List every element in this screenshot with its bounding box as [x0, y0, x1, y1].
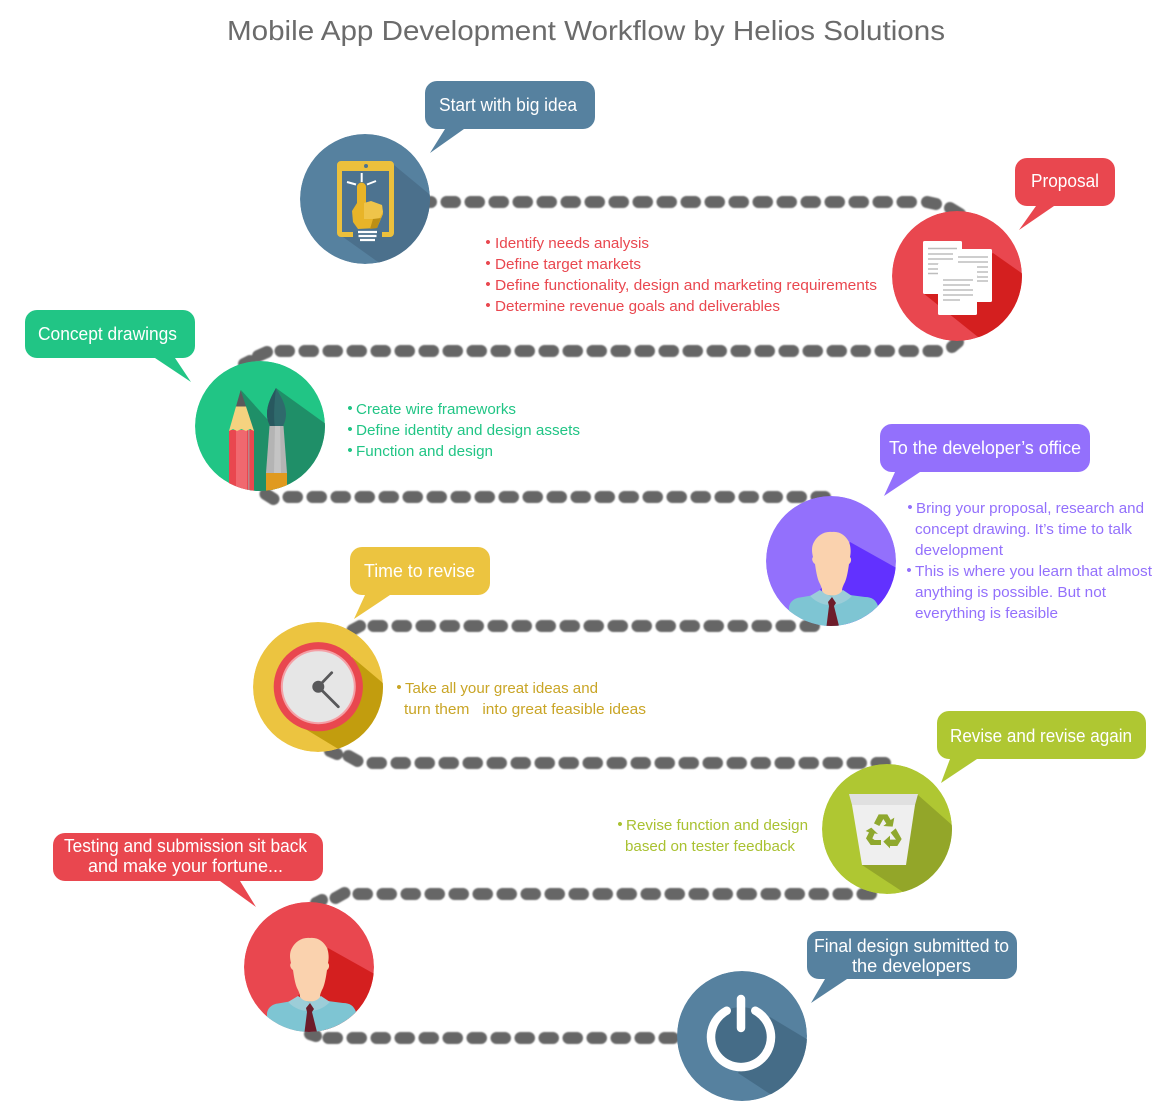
- connector: testing to final design: [310, 1034, 685, 1038]
- title: Mobile App Development Workflow by Helios Solutions: [227, 15, 945, 46]
- text block: developer bullets: •: [906, 562, 912, 579]
- text block: concept drawing bullets: •: [347, 442, 353, 459]
- icon: developer person: [766, 496, 896, 626]
- text block: concept drawing bullets: Function and design: [356, 443, 493, 460]
- callout: time to revise: [350, 547, 490, 619]
- text block: revise again bullets: [617, 816, 808, 855]
- callout: testing and submission: [53, 833, 323, 907]
- text block: developer bullets: development: [915, 542, 1004, 559]
- callout: proposal: [1015, 158, 1115, 230]
- text block: proposal bullets: Define target markets: [495, 256, 641, 273]
- connector: developer to revise: [352, 626, 820, 630]
- callout: concept drawings: [25, 310, 195, 382]
- text block: proposal bullets: Identify needs analysis: [495, 235, 649, 252]
- text block: concept drawing bullets: •: [347, 400, 353, 417]
- text block: time to revise bullets: •: [396, 679, 402, 696]
- connector: concept drawings to developer: [266, 494, 830, 499]
- connector: revise again to testing: [316, 893, 880, 903]
- text block: time to revise bullets: turn them into great feasible ideas: [404, 701, 646, 718]
- callout: start with big idea: [425, 81, 595, 153]
- callout: revise and revise again: [937, 711, 1146, 783]
- callout: proposal: Proposal: [1031, 171, 1099, 191]
- connector: proposal to concept drawings: [244, 342, 958, 364]
- text block: concept drawing bullets: Define identity and design assets: [356, 422, 580, 439]
- text block: proposal bullets: [485, 234, 877, 315]
- icon: tester person: [244, 902, 374, 1032]
- callout: revise and revise again: Revise and revise again: [950, 726, 1132, 746]
- icon: recycling bin: [822, 764, 960, 900]
- callout: concept drawings: Concept drawings: [38, 324, 177, 344]
- callout: time to revise: Time to revise: [364, 561, 475, 581]
- text block: proposal bullets: •: [485, 297, 491, 314]
- icon: pencil and brush: [195, 361, 330, 500]
- text block: developer bullets: Bring your proposal, research and: [916, 500, 1144, 517]
- text block: developer bullets: anything is possible. But not: [915, 584, 1107, 601]
- icon: proposal documents: [892, 211, 1022, 341]
- text block: proposal bullets: •: [485, 255, 491, 272]
- text block: developer bullets: [906, 499, 1153, 622]
- callout: testing and submission: Testing and submission sit back: [64, 836, 308, 856]
- text block: developer bullets: concept drawing. It’s time to talk: [915, 521, 1132, 538]
- text block: revise again bullets: Revise function and design: [626, 817, 808, 834]
- text block: concept drawing bullets: •: [347, 421, 353, 438]
- text block: proposal bullets: •: [485, 276, 491, 293]
- text block: proposal bullets: •: [485, 234, 491, 251]
- callout: testing and submission: and make your fortune...: [88, 856, 283, 876]
- callout: to the developer's office: To the developer’s office: [889, 438, 1081, 458]
- text block: time to revise bullets: Take all your great ideas and: [405, 680, 598, 697]
- callout: to the developer's office: [880, 424, 1090, 496]
- icon: power button: [677, 971, 807, 1101]
- text block: time to revise bullets: [396, 679, 646, 718]
- text block: revise again bullets: based on tester feedback: [625, 838, 796, 855]
- callout: final design submitted: the developers: [852, 956, 971, 976]
- text block: developer bullets: everything is feasible: [915, 605, 1058, 622]
- callout: final design submitted: [807, 931, 1017, 1003]
- callout: start with big idea: Start with big idea: [439, 95, 578, 115]
- icon: clock: [253, 622, 383, 752]
- connector: revise to revise again: [330, 751, 890, 763]
- callout: final design submitted: Final design submitted to: [814, 936, 1009, 956]
- text block: proposal bullets: Define functionality, design and marketing requirements: [495, 277, 877, 294]
- text block: concept drawing bullets: Create wire frameworks: [356, 401, 516, 418]
- text block: concept drawing bullets: [347, 400, 580, 460]
- icon: tablet and light bulb: [300, 134, 430, 264]
- text block: developer bullets: •: [907, 499, 913, 516]
- text block: revise again bullets: •: [617, 816, 623, 833]
- connector: idea to proposal: [422, 202, 960, 214]
- text block: proposal bullets: Determine revenue goals and deliverables: [495, 298, 780, 315]
- text block: developer bullets: This is where you learn that almost: [915, 563, 1153, 580]
